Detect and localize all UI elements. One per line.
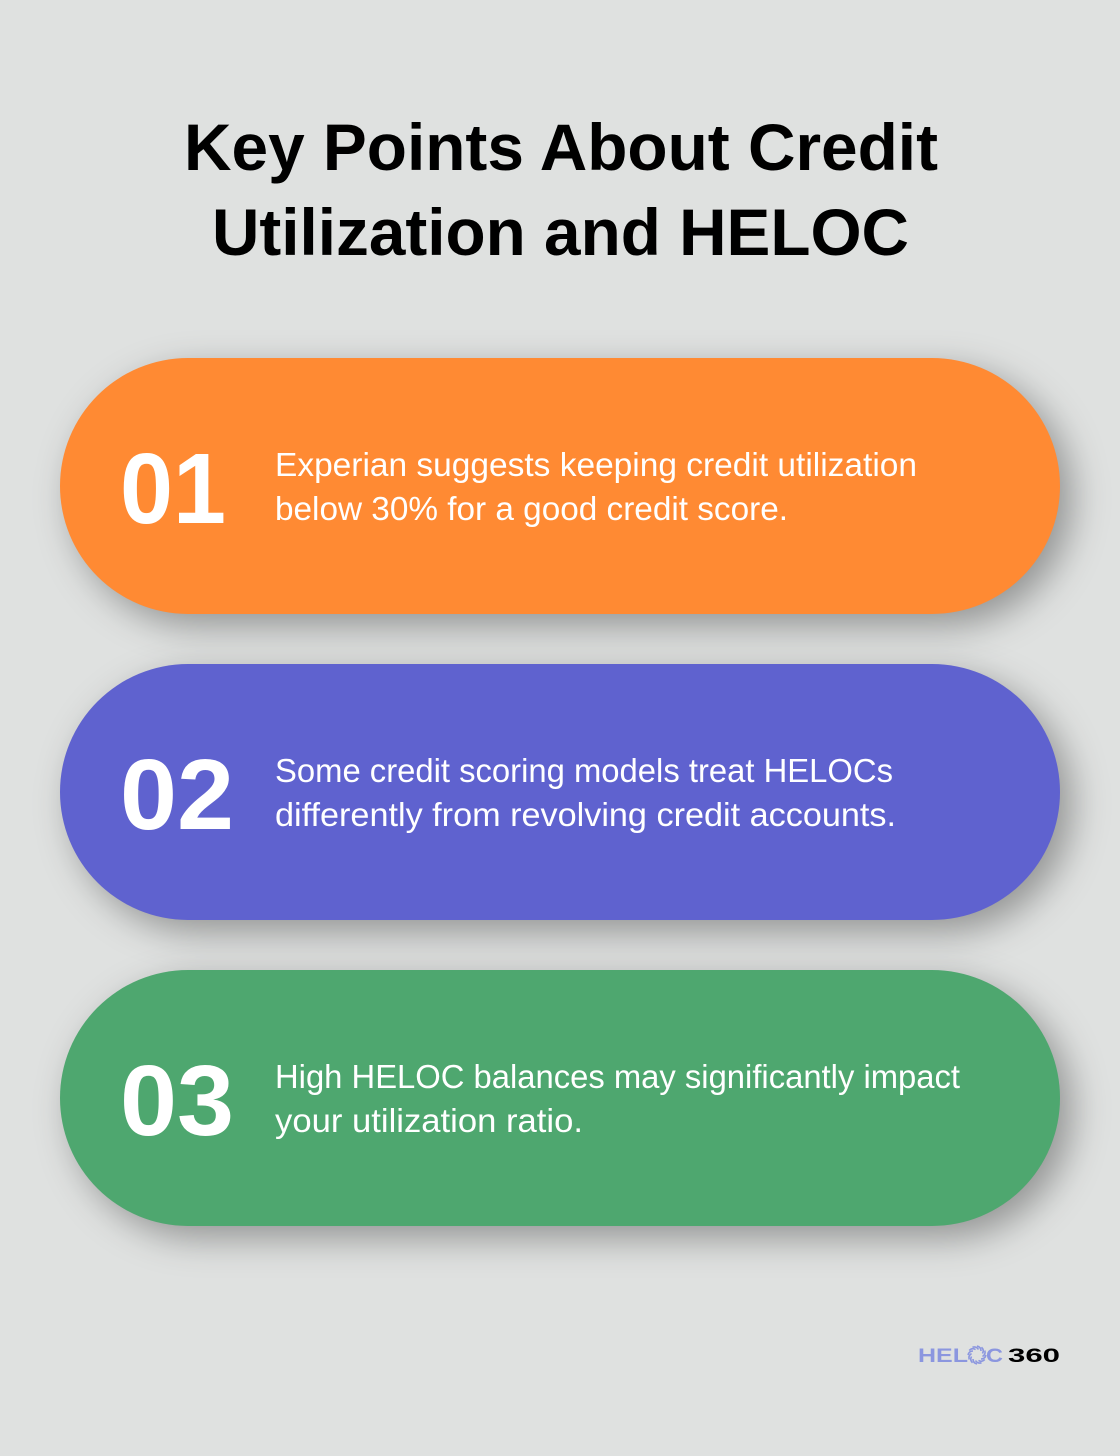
logo: HELOC360 [918, 1345, 1060, 1367]
icon: swirl O [967, 1345, 987, 1365]
text: point 03 [275, 1058, 960, 1139]
text: point 02: Some credit scoring models treat HELOCs [275, 752, 893, 789]
number 03: 03 [120, 1045, 234, 1157]
title: Utilization and HELOC [212, 195, 909, 269]
panel: point 03 [60, 970, 1072, 1238]
text: point 03: your utilization ratio. [275, 1102, 583, 1139]
panel: point 02 [60, 664, 1072, 932]
number 01: 01 [120, 433, 226, 545]
panel: point 01 [60, 358, 1072, 626]
text: point 01: below 30% for a good credit score. [275, 490, 788, 527]
text: point 02: differently from revolving credit accounts. [275, 796, 896, 833]
text: point 01: Experian suggests keeping credit utilization [275, 446, 917, 483]
logo: HELOC360: 360 [1008, 1346, 1060, 1367]
number 02: 02 [120, 739, 234, 851]
logo: HELOC360: C [986, 1346, 1003, 1367]
logo: HELOC360: HEL [918, 1346, 969, 1367]
text: point 03: High HELOC balances may significantly impact [275, 1058, 960, 1095]
title: Key Points About Credit [184, 110, 938, 184]
text: point 02 [275, 752, 896, 833]
title [184, 110, 938, 269]
text: point 01 [275, 446, 917, 527]
